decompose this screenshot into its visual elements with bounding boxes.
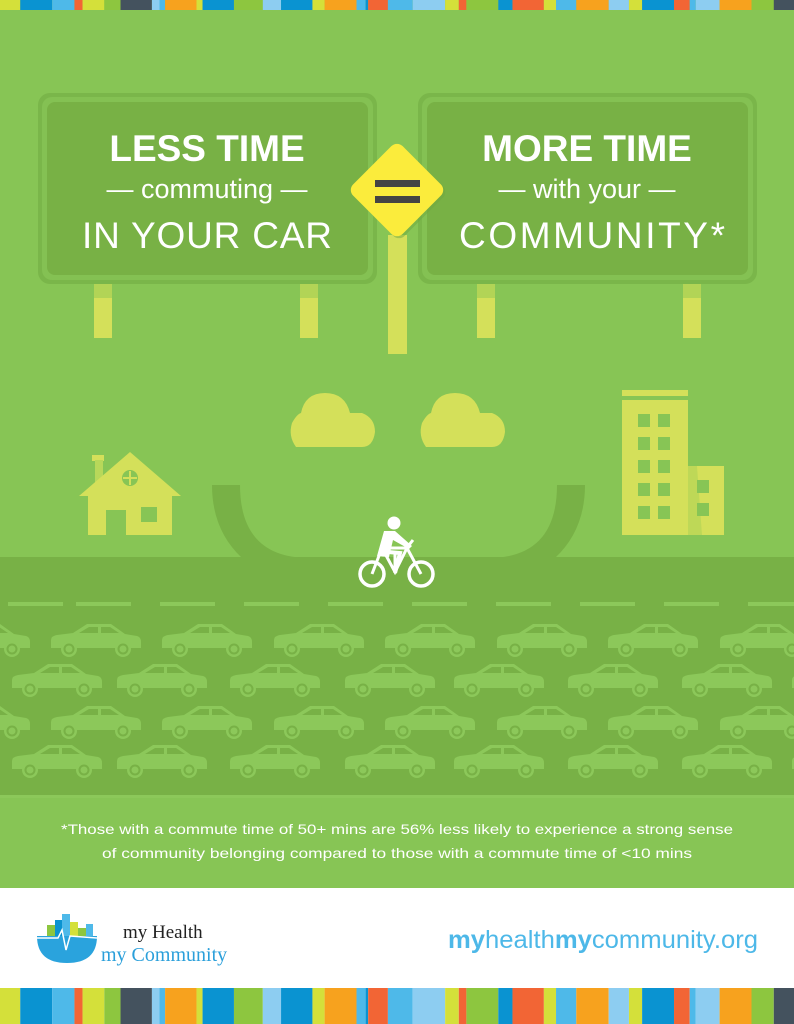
- footer white band: [0, 888, 794, 988]
- sign: less time commuting in your car: — commuting —: [106, 174, 308, 204]
- top stripe bar: [0, 0, 794, 10]
- logo: my Health: [123, 922, 203, 943]
- footnote: [61, 821, 733, 861]
- sign: more time with your community: [418, 93, 757, 338]
- clouds: [291, 393, 505, 447]
- icon: house: [79, 452, 181, 535]
- sign: less time commuting in your car: [38, 93, 377, 338]
- icon: buildings: [622, 390, 724, 535]
- half-pipe ramp: [212, 485, 585, 558]
- logo: [37, 914, 227, 966]
- footnote: *Those with a commute time of 50+ mins are 56% less likely to experience a strong sense: [61, 821, 733, 837]
- website url: myhealthmycommunity.org: [448, 926, 758, 954]
- sign: less time commuting in your car: LESS TIME: [109, 128, 305, 169]
- equals diamond sign: [348, 141, 448, 354]
- sign: more time with your community: — with your —: [498, 174, 676, 204]
- bottom stripe bar: [0, 988, 794, 1024]
- sign: more time with your community: MORE TIME: [482, 128, 692, 169]
- road: [0, 557, 794, 797]
- sign: more time with your community: COMMUNITY*: [459, 215, 725, 256]
- icon: cyclist: [360, 516, 433, 586]
- logo: my Community: [101, 944, 227, 966]
- footnote: of community belonging compared to those with a commute time of <10 mins: [102, 845, 692, 861]
- road dashes: [0, 602, 794, 798]
- traffic cars: [0, 624, 794, 778]
- sign: less time commuting in your car: IN YOUR CAR: [82, 215, 332, 256]
